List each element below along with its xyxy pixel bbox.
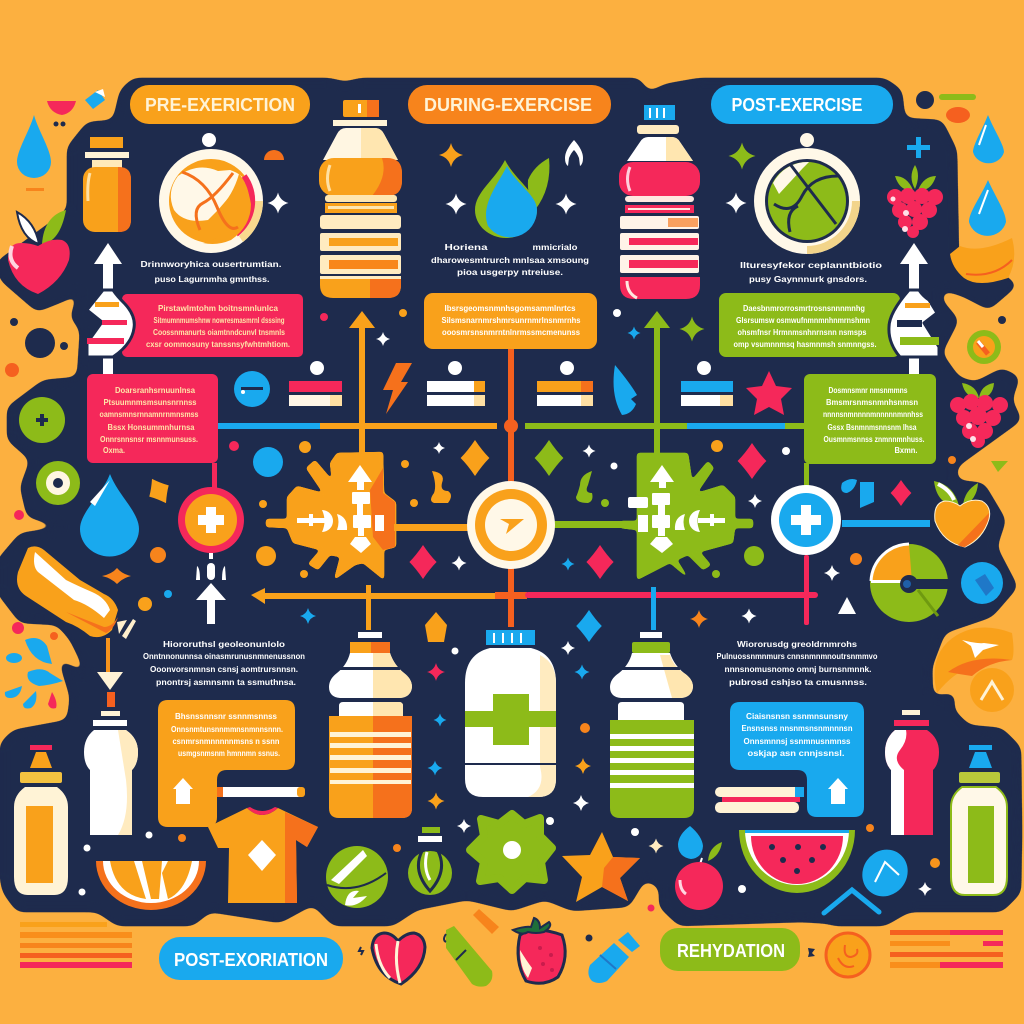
icon: right sports bottle	[951, 745, 1007, 895]
icon: blue leaf	[614, 365, 637, 415]
callout: pink box upper: Pirstawlmtohm boitnsmnlunlca	[158, 303, 278, 313]
heading pill: pre-exercise: PRE-EXERICTION	[145, 95, 295, 115]
icon: right plus circle	[771, 485, 841, 555]
icon: green splash	[620, 453, 753, 580]
callout: blue L box with house: Ensnsnss nnsnmsnsnmnnnsn	[742, 723, 852, 733]
arrow: pour line with arrow	[97, 638, 123, 707]
icon: left sports bottle	[14, 745, 68, 895]
sparkles: upper panel	[320, 140, 756, 346]
callout: green box upper: omp vsumnnmsq hasmnmsh snmnngss.	[734, 339, 876, 349]
icon: blue cross above raspberry	[907, 137, 930, 158]
icon: orange swoosh and circle	[934, 627, 1014, 712]
stripes: bottom left	[20, 922, 132, 968]
text block: lower left note: Onntnnonunnsa oinasmrunusnmnenussnon	[143, 651, 305, 661]
callout: green box lower: Bmsmrsnmsnmnhsnmsn	[826, 397, 918, 407]
text block: lower right note	[716, 639, 878, 687]
callout: green box upper: Glsrsumsw osmwufnmnmnhnmrnshmn	[736, 315, 870, 325]
text block: lower left note: Hiororuthsl geoleonunlolo	[163, 639, 285, 649]
callout: pink box lower: Oxma.	[103, 445, 125, 455]
connector: lines into central circle	[394, 521, 622, 531]
icon: top-left decorations	[26, 89, 105, 191]
callout: pink box upper: Coossnmanurts oiamtnndcunvl tnsmnls	[153, 327, 285, 337]
icon: small orange jar	[83, 137, 131, 232]
arrow: right up with hourglass	[889, 243, 939, 394]
heading pill: post exercise: POST-EXERCISE	[732, 95, 862, 115]
text block: during-exercise note	[431, 242, 589, 277]
icon: white jar with green cross	[465, 630, 556, 797]
icon: lightning bolt	[383, 363, 412, 414]
callout: pink box upper: cxsr oommosuny tanssnsyfwhtmhtiom.	[146, 339, 290, 349]
icon: lower orange bottle	[329, 632, 412, 818]
callout: orange box upper	[424, 293, 597, 349]
callout: pink box lower: Ptsuumnmsmsunsnrnnss	[104, 397, 197, 407]
text block: pre-exercise note: Drinnworyhica ousertrumtian.	[140, 259, 282, 269]
icon: splash droplets	[5, 622, 63, 708]
icon: raspberry top right	[887, 165, 943, 238]
icon: right top decorations	[916, 91, 976, 123]
icon: orange star	[562, 832, 640, 902]
heading pill: pre-exercise	[130, 85, 310, 124]
callout: green box lower	[804, 374, 936, 464]
icon: orange ball in circle	[159, 133, 288, 253]
icon: banana	[950, 238, 1014, 283]
callout: pink box lower: Doarsranhsrnuunlnsa	[115, 385, 195, 395]
icon: green bulb	[408, 827, 452, 895]
callout: pink box upper	[122, 294, 303, 357]
icon: orange splash	[266, 452, 396, 580]
icon: green ring fruit	[36, 461, 80, 505]
callout: pink box upper: Sitmumnmumshnw nowresmasmrnl dsssing	[154, 315, 284, 325]
icon: orange slice	[96, 861, 206, 910]
icon: blue dash circle	[234, 371, 270, 407]
callout: orange box upper: Silsmsnarnmrshmrsunrnmrlnsnmrnhs	[442, 315, 581, 325]
icon: green fruit ring right	[967, 316, 1006, 364]
icon: blue droplet top-left	[17, 115, 51, 178]
icon: pink heart fruit	[359, 933, 425, 984]
icon: green bottle tilted	[444, 909, 499, 987]
text block: lower left note: Ooonvorsnmnsn csnsj aomtrursnnsn.	[150, 664, 298, 674]
icon: pink bottle small	[885, 710, 939, 835]
text block: lower right note: pubrosd cshjso ta cmusnnss.	[729, 677, 867, 687]
icon: blue sphere	[961, 562, 1003, 604]
callout: orange L box with house: usmgsnmsnm hmnnmn ssnus.	[178, 748, 280, 758]
sparkles and dots: centre	[229, 440, 1008, 642]
icon: folded towels right	[715, 787, 804, 813]
icon: blue pill and chevron	[824, 841, 917, 913]
icon: apple with droplet	[675, 826, 723, 910]
arrow: small white up	[196, 553, 226, 624]
heading pill: during exercise: DURING-EXERCISE	[424, 95, 592, 115]
text block: pre-exercise note: puso Lagurnmha gmnthss.	[154, 274, 270, 284]
icon: left plus circle	[178, 487, 244, 553]
icon: navy splat and dots	[5, 318, 68, 377]
callout: pink box lower: Bssx Honsummnhurnsa	[108, 422, 195, 432]
callout: green box lower: nnnnsnmnnnnmnnnnnmnnhss	[823, 409, 923, 419]
icon: blue droplets right	[969, 115, 1006, 236]
icon: green gear	[470, 814, 552, 890]
icon: tipped orange bottle	[17, 546, 136, 639]
icon: lower green bottle	[610, 632, 694, 818]
heading pill: during exercise	[408, 85, 611, 124]
callout: green box lower: Dosmnsmnr nmsnmmns	[828, 385, 908, 395]
chart: green pie	[870, 544, 949, 622]
heading pill: rehydration	[660, 928, 800, 971]
icon: white bottle	[84, 711, 138, 835]
callout: pink box lower	[87, 374, 218, 463]
callout: pink box lower: oamnsmnsrnnamnrnmnsmss	[100, 409, 199, 419]
heading pill: post exercise	[711, 85, 893, 124]
callout: blue L box with house	[730, 702, 864, 817]
heading pill: post-exoriation	[159, 937, 343, 980]
text block: pre-exercise note	[140, 259, 282, 284]
text block: during-exercise note: pioa usgerpy ntreiuse.	[457, 267, 563, 277]
stripes: bottom right	[890, 930, 1003, 968]
text block: post-exercise note: Ilturesyfekor ceplanntbiotio	[740, 260, 882, 270]
callout: green box upper: Daesbnmrorrosmrtrosnsnnnmnhg	[743, 303, 865, 313]
heading pill: post-exoriation: POST-EXORIATION	[174, 950, 328, 970]
icon: large pink bottle	[619, 105, 700, 299]
sparkles and dots: lower panel	[78, 641, 940, 896]
text block: during-exercise note: mmicrialo	[532, 242, 578, 252]
callout: blue L box with house: oskjap asn cnnjssnsl.	[748, 748, 844, 758]
callout: orange L box with house: csnmrsnmnnnnnmsns n ssnn	[172, 736, 280, 746]
callout: blue L box with house: Ciaisnsnsn ssnmnsunsny	[746, 711, 848, 721]
icon: watermelon slice	[739, 830, 855, 893]
callout: blue L box with house: Onnsmnnsj ssnmnusnmnss	[744, 736, 851, 746]
callout: orange L box with house: Bhsnssnnsnr ssnnmsnnss	[175, 711, 277, 721]
icon: green and blue droplet	[475, 158, 549, 238]
icon: green circle with cross	[19, 397, 65, 443]
callout: green box lower: Bxmn.	[894, 445, 918, 455]
connector: lower horizontal line	[251, 585, 818, 630]
callout: orange L box with house: Onnsnmtunsnnmmnsnmnnsnnn.	[171, 724, 283, 734]
icon: orange apple	[934, 481, 990, 547]
text block: during-exercise note: dharowesmtrurch mnlsaa xmsoung	[431, 255, 589, 265]
icon: strawberry	[513, 918, 565, 983]
text block: post-exercise note: pusy Gaynnnurk gnsdors.	[749, 274, 867, 284]
text block: lower left note	[143, 639, 305, 687]
callout: green box lower: Gssx Bsnmnmsnnsnm lhsa	[828, 422, 917, 432]
icon: orange T-shirt	[208, 807, 318, 903]
icon: large orange bottle	[319, 100, 402, 298]
text block: post-exercise note	[740, 260, 882, 284]
icon: pink apple	[8, 210, 70, 294]
callout: pink box lower: Onnrsnnsnsr msnnmunsuss.	[100, 434, 198, 444]
text block: during-exercise note: Horiena	[444, 242, 488, 252]
icon: orange spiral	[808, 933, 870, 977]
callout: green box upper: ohsmfnsr Hrmnmsnhnrnsnn nsmsps	[738, 327, 867, 337]
icon: raspberry right	[950, 383, 1008, 448]
icon: large blue droplet	[80, 474, 139, 556]
callout: green box upper	[719, 293, 900, 357]
heading pill: rehydration: REHYDATION	[677, 941, 785, 961]
text block: lower right note: Pulnuossnmnmurs cnnsnmnmnoutrsnmmvo	[716, 651, 878, 661]
icons: small bars and dots row	[289, 361, 733, 406]
icon: rolled towel left	[217, 787, 305, 797]
connector: upper horizontal lines and arrows	[212, 311, 930, 627]
icon: central arrow circle	[467, 481, 555, 569]
icon: green ball in circle	[754, 133, 860, 254]
arrow: left up with hourglass	[87, 243, 134, 394]
text block: lower right note: nnnsnomusnomo omnj burnsnmnnk.	[724, 664, 872, 674]
text block: lower right note: Wiororusdg greoldrnmrohs	[737, 639, 857, 649]
callout: orange box upper: Ibsrsgeomsnmnhsgomsammlnrtcs	[444, 303, 576, 313]
icon: pink star	[746, 371, 792, 415]
icon: blue tube	[586, 904, 654, 983]
callout: green box lower: Ousmnmsnnss znmnnmnhuss.	[824, 434, 924, 444]
icon: orange diamond and dots left	[14, 473, 176, 611]
callout: orange L box with house	[158, 700, 295, 827]
icon: green tennis ball	[326, 846, 388, 908]
text block: lower left note: pnontrsj asmnsmn ta ssmuthnsa.	[156, 677, 296, 687]
callout: orange box upper: ooosmrsnsnmrntnlnrmssmcmenunss	[442, 327, 580, 337]
